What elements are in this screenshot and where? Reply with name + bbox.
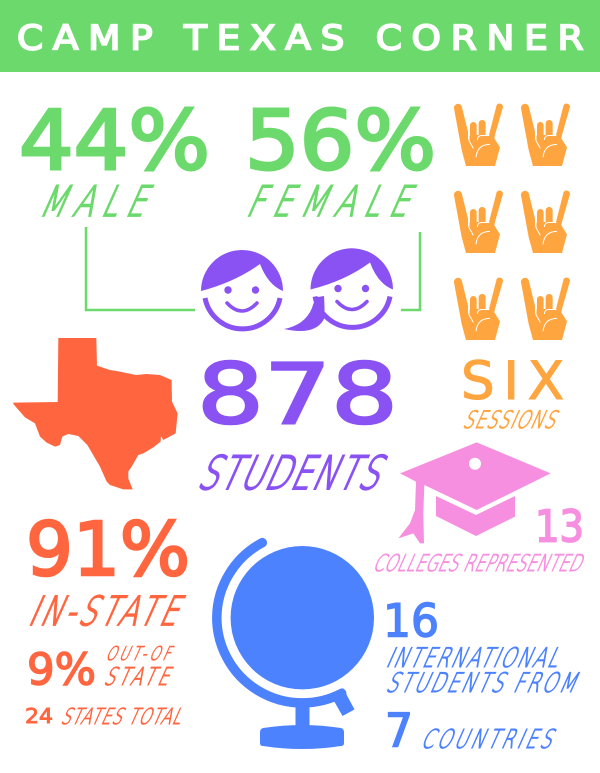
stat: 878 students: STUDENTS (191, 447, 395, 500)
stat: 16 international students: 16 (383, 594, 439, 648)
stat: 56% female (240, 94, 436, 227)
stat: 56% female: 56% (245, 94, 436, 189)
icon: boy face (201, 250, 283, 329)
stat: 13 colleges represented: 13 (535, 502, 584, 552)
header banner (0, 0, 600, 72)
icon: texas map (13, 338, 178, 489)
stat: 878 students (191, 346, 398, 500)
stat: 91% in-state: 91% (26, 507, 190, 593)
stat: 7 countries: COUNTRIES (417, 724, 561, 755)
stat: six sessions: SIX (461, 351, 564, 412)
icon: hand row 2 left (454, 191, 503, 253)
icon: hand row 3 left (454, 278, 503, 340)
stat: 56% female: FEMALE (240, 178, 423, 227)
stat: six sessions: SESSIONS (459, 407, 563, 435)
stat: 91% in-state: IN-STATE (23, 588, 192, 635)
stat: 9% out-of-state: STATE (100, 663, 177, 692)
stat: 9% out-of-state: 9% (27, 644, 96, 696)
stat: 91% in-state (23, 507, 192, 635)
stat: 16 international students (382, 594, 585, 699)
stat: 7 countries: 7 (385, 704, 413, 758)
icon: hand row 1 left (454, 104, 503, 166)
stat: 16 international students: STUDENTS FROM (382, 667, 585, 699)
connector lines (86, 227, 420, 310)
stat: 9% out-of-state: OUT-OF (103, 644, 177, 665)
icon: graduation cap (398, 442, 551, 543)
stat: 9% out-of-state (27, 644, 177, 696)
icon: hand row 1 right (521, 104, 570, 166)
icon: hand row 3 right (521, 278, 570, 340)
icon: girl face (284, 248, 393, 331)
stat: 878 students: 878 (197, 346, 398, 443)
icon: hand row 2 right (521, 191, 570, 253)
stat: 44% male: 44% (19, 94, 210, 189)
stat: 7 countries (385, 704, 561, 758)
stat: 13 colleges represented: COLLEGES REPRESENTED (370, 549, 590, 576)
stat: 24 states total: STATES TOTAL (58, 703, 189, 729)
stat: 13 colleges represented (370, 502, 590, 576)
icon: globe (217, 543, 374, 749)
title: CAMP TEXAS CORNER (17, 19, 584, 58)
stat: 44% male (19, 94, 210, 227)
stat: 44% male: MALE (33, 178, 160, 227)
stat: 24 states total: 24 (25, 704, 53, 728)
stat: 16 international students: INTERNATIONAL (382, 642, 568, 674)
